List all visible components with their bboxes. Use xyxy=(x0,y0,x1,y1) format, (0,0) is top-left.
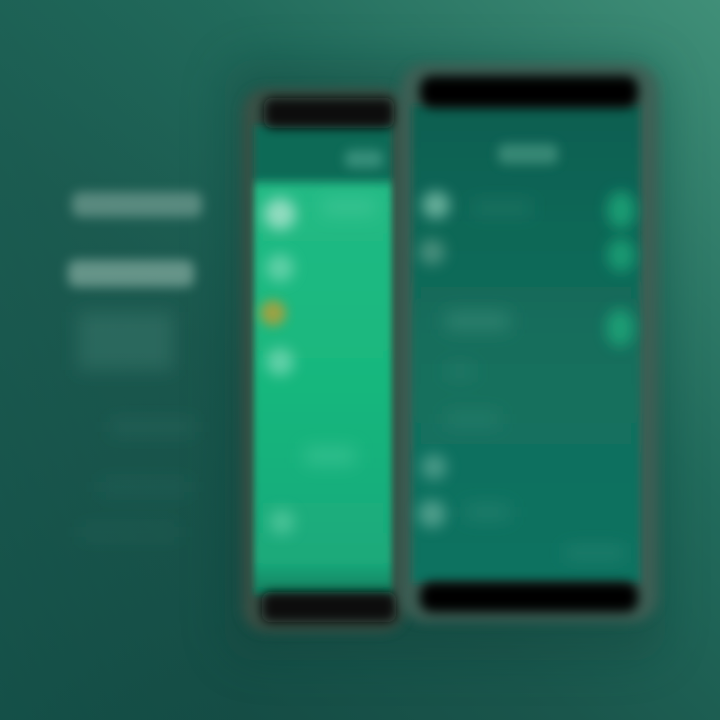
chat text rows xyxy=(305,200,376,464)
left phone bottom bar xyxy=(262,592,396,622)
chat avatars xyxy=(260,198,296,535)
heading line 1 xyxy=(72,192,202,217)
phone shadow xyxy=(225,60,665,660)
left phone top bar xyxy=(264,98,394,128)
left phone xyxy=(242,88,406,632)
right phone bottom bar xyxy=(420,582,638,612)
heading line 2 xyxy=(68,260,194,287)
right phone top bar xyxy=(420,76,638,108)
left text block xyxy=(68,192,202,539)
body text lines xyxy=(78,312,195,539)
right phone screen xyxy=(412,105,640,583)
right phone xyxy=(400,64,658,622)
left phone screen xyxy=(254,125,392,595)
right phone body xyxy=(400,64,658,622)
header title xyxy=(498,144,558,164)
header title xyxy=(345,150,383,168)
green status badges xyxy=(606,191,635,347)
contact text rows xyxy=(445,202,625,558)
contact avatars xyxy=(418,191,450,528)
left phone body xyxy=(242,88,406,632)
